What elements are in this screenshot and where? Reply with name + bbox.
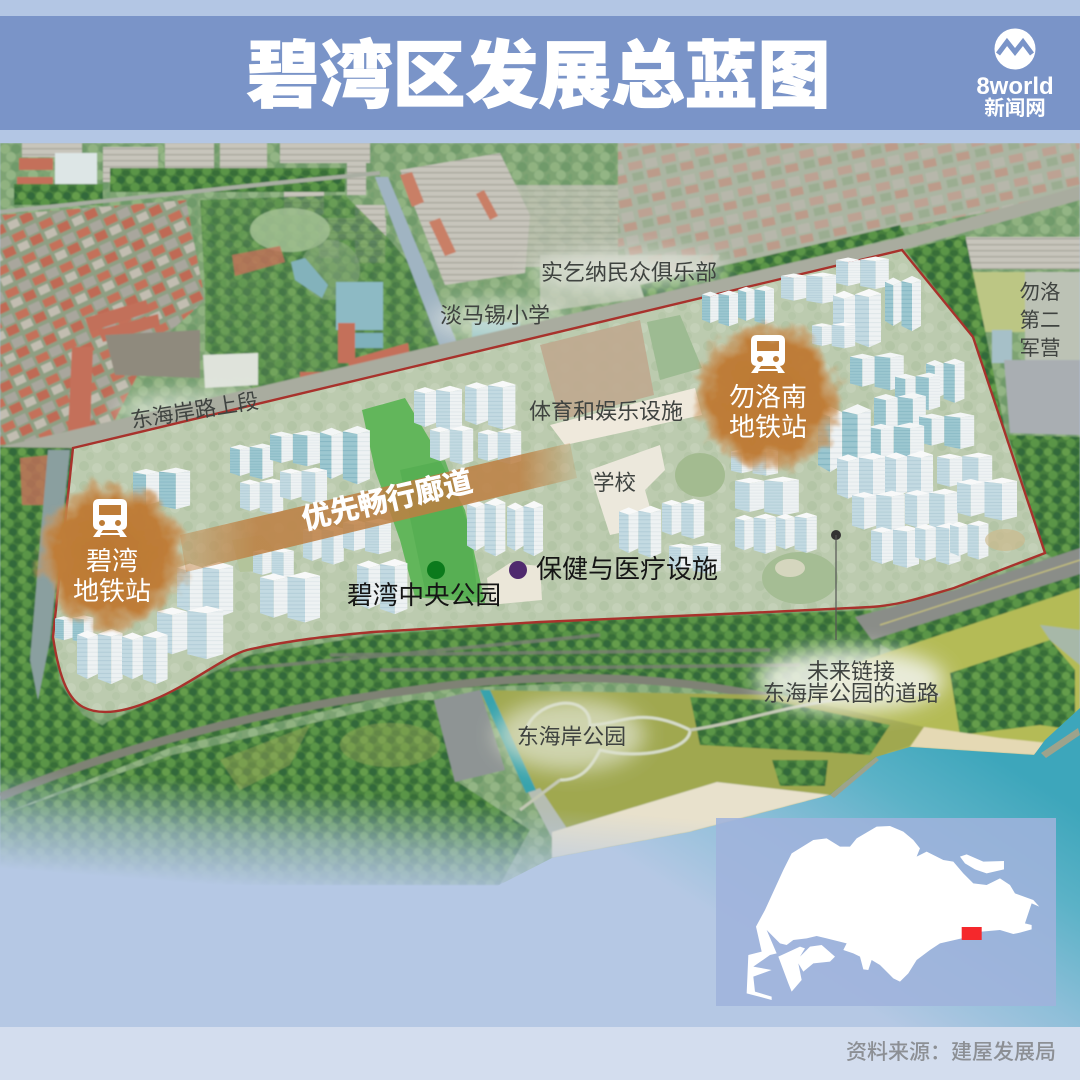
development area boundary [53,250,1045,712]
label: central park: 碧湾中央公园 [347,581,501,610]
panel: Singapore inset map [716,818,1056,1006]
label: healthcare facilities: 保健与医疗设施 [536,554,718,584]
label: community club: 实乞纳民众俱乐部 [541,260,717,285]
label: future link road: 东海岸公园的道路 [763,681,939,706]
marker: health facility dot [509,561,527,579]
logo: 8world: 8world [976,73,1054,100]
source note: 资料来源：建屋发展局 [846,1041,1056,1064]
label: East Coast Park: 东海岸公园 [517,724,626,749]
north-west housing estate [0,200,205,445]
label: sports and recreation: 体育和娱乐设施 [529,399,683,424]
schools and blocks north [400,153,530,285]
logo: 8world [976,28,1054,120]
east coast park lawn [478,690,924,832]
corridor label: 优先畅行廊道 [299,465,476,536]
label: Bedok South MRT station: 地铁站 [729,412,807,442]
north east [966,237,1080,269]
boundary line [53,250,1045,712]
label: Bedok camp II: 第二 [1020,309,1060,332]
marker: central park dot [427,561,445,579]
label: Siglap MRT station: 碧湾 [86,546,138,576]
residential towers [55,256,1025,684]
land fade [0,755,1080,900]
icon: Siglap MRT [93,499,127,537]
label: Bedok camp II: 勿洛 [1020,281,1060,304]
footer band [0,1027,1080,1080]
location marker [962,927,982,940]
coastal road north [0,186,1080,460]
station blob: Bedok South [692,321,844,473]
label: Bedok South MRT station: 勿洛南 [729,382,807,412]
health building [487,563,542,605]
road [855,548,1080,640]
station blob: Siglap [36,480,188,632]
tree belt south of development [0,610,880,815]
label: Siglap MRT station: 地铁站 [73,576,151,606]
green middle north-west [200,195,450,395]
label: school: 学校 [593,471,636,495]
park paths [525,703,690,780]
header band [0,0,1080,143]
carpark [434,690,505,782]
logo: 8world: 新闻网 [984,96,1046,120]
central park [362,398,485,603]
leader line: future link [831,530,841,640]
corridor band [180,443,577,572]
sports and recreation plot [540,320,654,420]
school plot [590,445,665,535]
label: Upper East Coast Road: 东海岸路上段 [129,389,260,433]
label: Bedok camp II: 军营 [1020,337,1060,360]
icon: Bedok South MRT [751,335,785,373]
title: 碧湾区发展总蓝图 [246,36,830,117]
beach [552,782,830,858]
label: Temasek primary school: 淡马锡小学 [440,303,550,328]
label: future link road: 未来链接 [807,659,895,684]
sea [470,708,1080,1027]
Singapore outline [747,826,1039,1000]
west edge [0,447,120,805]
